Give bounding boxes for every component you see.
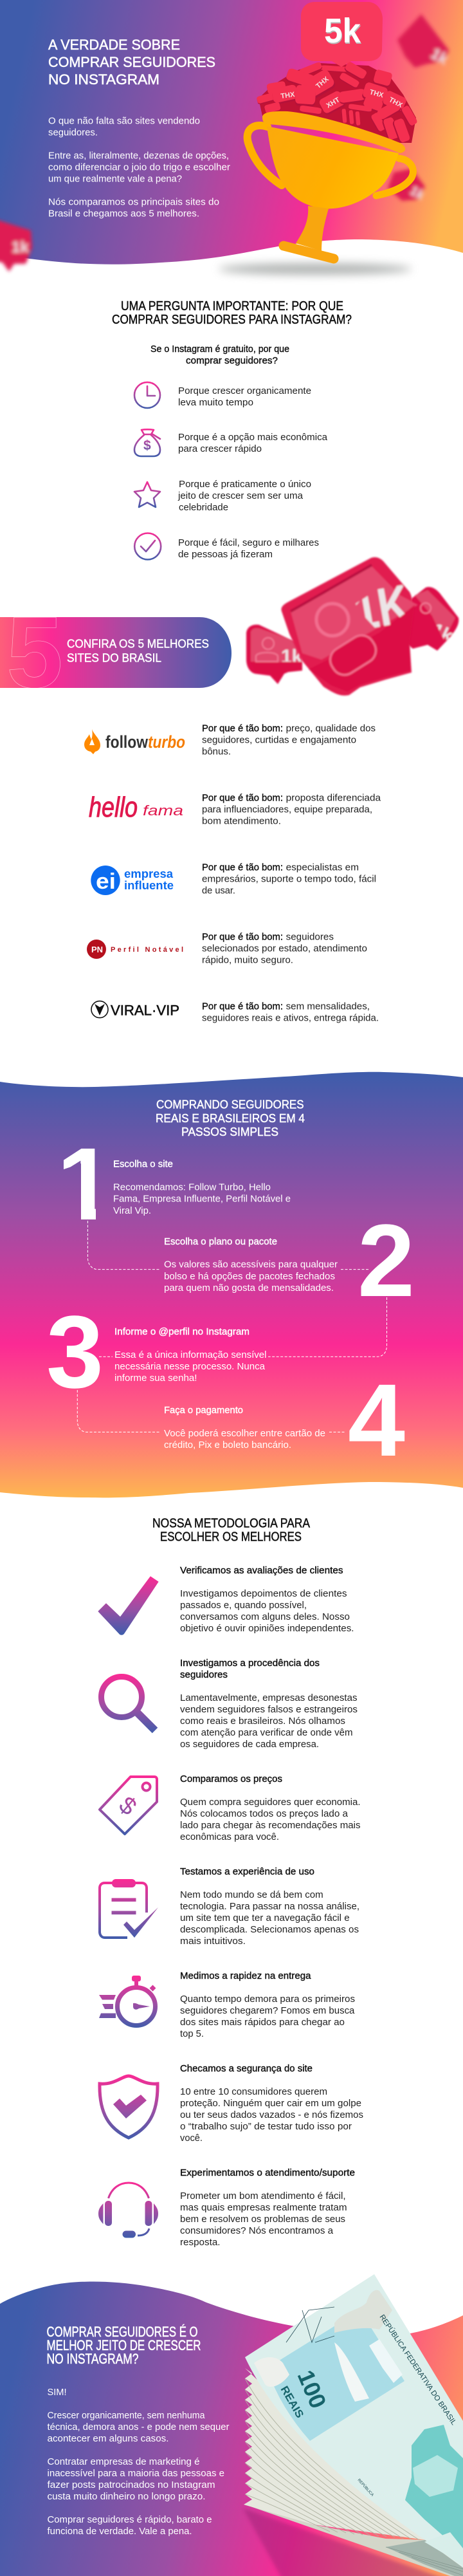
site 4 text: selecionados por estado, atendimento — [202, 943, 367, 954]
subheading: Se o Instagram é gratuito, por que — [150, 344, 289, 355]
method 7 text: consumidores? Nós encontramos a — [180, 2225, 334, 2236]
note stack side — [245, 2505, 463, 2576]
steps heading: COMPRANDO SEGUIDORES — [156, 1098, 304, 1111]
heap of red like badges: THX — [368, 88, 385, 100]
site 3 text — [202, 862, 376, 896]
banner background — [0, 617, 232, 688]
icon: price tag — [100, 1777, 157, 1834]
conclusion text: Contratar empresas de marketing é — [48, 2456, 199, 2467]
method 1 text: passados e, quando possível, — [180, 1600, 307, 1611]
conclusion heading: NO INSTAGRAM? — [46, 2351, 139, 2367]
method 1 text — [180, 1565, 354, 1634]
icon: headset — [98, 2183, 158, 2238]
panel: hero — [0, 0, 463, 275]
step 4: Você poderá escolher entre cartão de — [164, 1429, 325, 1439]
trophy handles — [248, 125, 282, 185]
steps gradient background — [0, 1072, 463, 1497]
methodology heading: NOSSA METODOLOGIA PARA — [152, 1517, 311, 1531]
conclusion text: custa muito dinheiro no longo prazo. — [48, 2491, 206, 2502]
blurred badge middle: 1k — [408, 183, 428, 203]
site 3 text: Por que é tão bom: — [202, 862, 283, 873]
logo: perfil notavel: PN — [91, 945, 103, 954]
blurred badge middle — [388, 169, 428, 203]
blurred badge right: 1k — [428, 45, 451, 69]
logo: perfil notavel — [87, 940, 183, 959]
banner title: CONFIRA OS 5 MELHORES — [67, 637, 209, 651]
method 6 text — [180, 2063, 363, 2144]
method 3 text — [180, 1774, 360, 1842]
icon: shield — [100, 2076, 158, 2138]
panel: four steps — [0, 1072, 463, 1497]
conclusion heading — [46, 2324, 201, 2367]
5k badge: 5k — [324, 12, 361, 50]
method 2 text: Investigamos a procedência dos — [180, 1658, 320, 1669]
method 2 text — [180, 1658, 358, 1750]
logo: followturbo: follow — [105, 732, 149, 752]
step 2: 2 — [358, 1203, 415, 1318]
method 1 text: Investigamos depoimentos de clientes — [180, 1588, 347, 1599]
site 1 text — [202, 723, 376, 757]
hero intro text: um que realmente vale a pena? — [48, 174, 182, 185]
reason: safe: de pessoas já fizeram — [178, 549, 273, 560]
conclusion text: fazer posts patrocinados no Instagram — [48, 2479, 215, 2490]
method 7 text: resposta. — [180, 2237, 220, 2248]
method 5 text — [180, 1970, 355, 2039]
method 7 text: mas quais empresas realmente tratam — [180, 2202, 347, 2213]
note text reais: REAIS — [278, 2384, 306, 2420]
step 2: bolso e há opções de pacotes fechados — [164, 1272, 335, 1282]
site 5 text — [202, 1001, 379, 1024]
conclusion text: técnica, demora anos - e pode nem sequer — [48, 2422, 229, 2432]
heap of red like badges: THX — [280, 91, 296, 100]
site 5 text: seguidores reais e ativos, entrega rápida. — [202, 1013, 379, 1024]
step 1: 1 — [57, 1126, 114, 1241]
connector 1 to 2 — [87, 1221, 370, 1270]
method 2 text: seguidores — [180, 1669, 228, 1680]
step 2: Escolha o plano ou pacote — [164, 1237, 277, 1247]
5k badge: 5k — [325, 13, 362, 51]
method 5 text: dos sites mais rápidos para chegar ao — [180, 2017, 345, 2028]
step 3: necessária nesse processo. Nunca — [114, 1362, 266, 1372]
icon: check circle — [134, 533, 161, 560]
site 2 text — [202, 793, 381, 826]
logo: followturbo: turbo — [148, 732, 185, 752]
method 2 text: como reais e brasileiros. Nós olhamos — [180, 1716, 345, 1727]
trophy bowl — [267, 126, 399, 208]
icon: clipboard — [100, 1879, 158, 1938]
note watermark areas — [267, 2310, 404, 2441]
trophy rim — [262, 111, 405, 153]
step 1: Recomendamos: Follow Turbo, Hello — [113, 1183, 271, 1193]
small badge left — [246, 625, 303, 684]
logo: followturbo — [84, 729, 185, 754]
subheading — [150, 344, 289, 366]
conclusion text: Comprar seguidores é rápido, barato e — [48, 2514, 212, 2525]
method 6 text: você. — [180, 2133, 203, 2144]
small badge right: 1k — [429, 619, 456, 646]
1k red badges illustration — [246, 557, 458, 696]
reason: time — [178, 385, 311, 408]
method 7 text: Experimentamos o atendimento/suporte — [180, 2167, 355, 2178]
icon: money bag — [134, 429, 160, 456]
hero intro text: Brasil e chegamos aos 5 melhores. — [48, 208, 199, 219]
subheading: comprar seguidores? — [186, 355, 278, 366]
heading — [112, 299, 352, 327]
reason: safe: Porque é fácil, seguro e milhares — [178, 537, 319, 548]
panel: methodology — [98, 1517, 363, 2248]
large badge — [281, 557, 418, 696]
step 2 — [164, 1203, 415, 1318]
method 6 text: 10 entre 10 consumidores querem — [180, 2086, 327, 2097]
5k badge — [301, 2, 383, 67]
logo: hello fama: fama — [143, 802, 183, 819]
method 4 text: mais intuitivos. — [180, 1936, 246, 1947]
trophy base — [284, 246, 334, 259]
icon: clock — [134, 382, 160, 408]
note engraved star — [286, 2307, 334, 2342]
step 3: informe sua senha! — [114, 1373, 197, 1384]
hero title: A VERDADE SOBRE — [48, 37, 180, 53]
logo: viral vip: VIRAL·VIP — [111, 1003, 179, 1019]
conclusion gradient background — [0, 2281, 463, 2576]
banner title: SITES DO BRASIL — [67, 651, 161, 665]
logo: empresa influente — [91, 866, 174, 895]
hero gradient background with wave — [0, 0, 463, 264]
method 4 text: Nem todo mundo se dá bem com — [180, 1889, 323, 1900]
icon: stopwatch — [99, 1976, 156, 2026]
site 4 text: Por que é tão bom: — [202, 931, 283, 942]
heap of red like badges — [256, 61, 418, 144]
note shadow — [243, 2508, 450, 2576]
conclusion text: inacessível para a maioria das pessoas e — [48, 2468, 224, 2479]
method 5 text: seguidores chegarem? Fomos em busca — [180, 2005, 355, 2016]
method 5 text: Medimos a rapidez na entrega — [180, 1970, 311, 1981]
connector 3 to 4 — [77, 1390, 345, 1432]
blurred badge left: 1k — [12, 239, 29, 256]
conclusion text: Crescer organicamente, sem nenhuma — [48, 2410, 205, 2421]
method 5 text: Quanto tempo demora para os primeiros — [180, 1994, 355, 2005]
steps heading: REAIS E BRASILEIROS EM 4 — [156, 1112, 305, 1125]
method 4 text: Testamos a experiência de uso — [180, 1866, 314, 1877]
heap of red like badges: XHT — [325, 96, 341, 110]
hero intro text: seguidores. — [48, 127, 98, 138]
trophy illustration — [219, 2, 451, 275]
site 4 text: seguidores — [286, 931, 334, 942]
reason: celebrity: Porque é praticamente o único — [179, 479, 311, 490]
blurred badge right — [397, 14, 451, 69]
step 1: Viral Vip. — [113, 1206, 151, 1216]
method 4 text: tecnologia. Para passar na nossa análise, — [180, 1901, 359, 1912]
reason: celebrity: celebridade — [179, 502, 228, 513]
heading: COMPRAR SEGUIDORES PARA INSTAGRAM? — [112, 313, 352, 327]
method 1 text: objetivo é ouvir opiniões independentes. — [180, 1623, 354, 1634]
hero title — [48, 37, 215, 88]
hero intro text: O que não falta são sites vendendo — [48, 116, 200, 127]
site 1 text: Por que é tão bom: — [202, 723, 283, 734]
connector 2 to 3 — [99, 1297, 387, 1357]
step 4 — [164, 1362, 405, 1478]
methodology heading: ESCOLHER OS MELHORES — [160, 1530, 302, 1544]
large badge: 1K — [349, 573, 414, 642]
heap of red like badges: THX — [314, 75, 331, 90]
steps heading — [156, 1098, 305, 1138]
step 3: Informe o @perfil no Instagram — [114, 1327, 250, 1337]
site 5 text: Por que é tão bom: — [202, 1001, 283, 1012]
panel: conclusion — [0, 2274, 463, 2576]
note text 100: 100 — [293, 2366, 332, 2412]
fanned note edges — [244, 2368, 425, 2540]
reason: safe — [178, 537, 319, 560]
conclusion text: SIM! — [48, 2387, 67, 2398]
method 2 text: com atenção para verificar de onde vêm — [180, 1727, 353, 1738]
reason: celebrity — [177, 479, 311, 513]
method 6 text: o “trabalho sujo” de testar tudo isso por — [180, 2121, 352, 2132]
hero intro text: como diferenciar o joio do trigo e escolher — [48, 162, 230, 173]
methodology heading — [152, 1517, 311, 1544]
method 2 text: Lamentavelmente, empresas desonestas — [180, 1692, 358, 1703]
reason: price: Porque é a opção mais econômica — [178, 432, 328, 443]
trophy stem — [296, 206, 329, 251]
logo: hello fama — [89, 792, 183, 823]
logo: perfil notavel: Perfil Notável — [111, 946, 183, 954]
method 3 text: econômicas para você. — [180, 1831, 279, 1842]
conclusion heading: COMPRAR SEGUIDORES É O — [46, 2324, 198, 2340]
bank notes illustration — [243, 2274, 463, 2576]
reason: time: Porque crescer organicamente — [178, 385, 311, 396]
hero intro text — [48, 116, 230, 219]
conclusion heading: MELHOR JEITO DE CRESCER — [46, 2337, 201, 2353]
note portrait — [405, 2425, 463, 2548]
banner title — [67, 637, 209, 665]
step 1: Escolha o site — [113, 1160, 173, 1170]
small badge right — [408, 586, 460, 651]
method 2 text: vendem seguidores falsos e estrangeiros — [180, 1704, 358, 1715]
step 1 — [64, 1148, 291, 1219]
conclusion text — [48, 2387, 229, 2537]
method 3 text: Comparamos os preços — [180, 1774, 282, 1784]
panel: top 5 banner — [0, 557, 458, 709]
steps heading: PASSOS SIMPLES — [181, 1126, 278, 1138]
method 3 text: lado para chegar às recomendações mais — [180, 1820, 360, 1831]
method 2 text: os seguidores de cada empresa. — [180, 1739, 319, 1750]
method 6 text: proteção. Ninguém quer cair em um golpe — [180, 2098, 361, 2109]
step 4: crédito, Pix e boleto bancário. — [164, 1440, 291, 1450]
reason: time: leva muito tempo — [178, 397, 253, 408]
site 3 text: especialistas em — [286, 862, 359, 873]
site 5 text: sem mensalidades, — [286, 1001, 370, 1012]
icon: price tag: $ — [114, 1792, 141, 1821]
step 3: 3 — [46, 1294, 104, 1409]
conclusion text: acontecer em alguns casos. — [48, 2433, 168, 2444]
site 1 text: preço, qualidade dos — [286, 723, 376, 734]
site 2 text: para influenciadores, equipe preparada, — [202, 804, 372, 815]
site 1 text: seguidores, curtidas e engajamento — [202, 735, 356, 746]
conclusion text: funciona de verdade. Vale a pena. — [48, 2526, 192, 2537]
logo: empresa influente: empresa — [124, 867, 174, 880]
reason: price — [178, 432, 328, 454]
site 2 text: proposta diferenciada — [286, 793, 381, 803]
method 4 text — [180, 1866, 359, 1947]
method 3 text: Quem compra seguidores quer economia. — [180, 1797, 360, 1808]
heading: UMA PERGUNTA IMPORTANTE: POR QUE — [121, 299, 343, 313]
top note — [245, 2274, 463, 2568]
step 2: Os valores são acessíveis para qualquer — [164, 1260, 338, 1270]
site 3 text: empresários, suporte o tempo todo, fácil — [202, 874, 376, 885]
blurred badge left — [0, 219, 32, 272]
hero title: COMPRAR SEGUIDORES — [48, 54, 215, 70]
site 1 text: bônus. — [202, 746, 231, 757]
step 4: 4 — [348, 1362, 405, 1478]
method 7 text — [180, 2167, 355, 2248]
icon: money bag: $ — [143, 438, 151, 453]
step 1: Fama, Empresa Influente, Perfil Notável e — [113, 1194, 291, 1205]
trophy shadow — [219, 263, 412, 275]
logo: empresa influente: influente — [124, 879, 174, 892]
logo: empresa influente: ei — [96, 869, 116, 894]
icon: magnifier — [102, 1677, 155, 1730]
step 3 — [46, 1294, 266, 1409]
method 4 text: descomplicada. Selecionamos apenas os — [180, 1924, 359, 1935]
step 2: para quem não gosta de mensalidades. — [164, 1283, 334, 1293]
method 6 text: ou ter seus dados vazados - e nós fizemos — [180, 2109, 363, 2120]
method 7 text: bem e resolvem os problemas de seus — [180, 2214, 345, 2225]
hero intro text: Nós comparamos os principais sites do — [48, 197, 219, 208]
outlined number 5: 5 — [6, 596, 63, 709]
site 4 text — [202, 931, 367, 965]
step 4: Faça o pagamento — [164, 1405, 243, 1416]
note text republica: REPÚBLICA FEDERATIVA DO BRASIL — [378, 2313, 458, 2427]
method 4 text: um site tem que ter a navegação fácil e — [180, 1913, 350, 1923]
step 3: Essa é a única informação sensível — [114, 1350, 266, 1360]
method 1 text: conversamos com alguns deles. Nosso — [180, 1611, 350, 1622]
method 3 text: Nós colocamos todos os preços lado a — [180, 1808, 349, 1819]
method 7 text: Prometer um bom atendimento é fácil, — [180, 2191, 346, 2201]
hero title: NO INSTAGRAM — [48, 71, 159, 88]
note small text: REPÚBLICA — [357, 2478, 374, 2497]
reason: celebrity: jeito de crescer sem ser uma — [177, 490, 304, 501]
method 5 text: top 5. — [180, 2028, 204, 2039]
method 6 text: Checamos a segurança do site — [180, 2063, 313, 2074]
method 1 text: Verificamos as avaliações de clientes — [180, 1565, 343, 1576]
logo: hello fama: hello — [89, 792, 138, 823]
panel: why buy followers — [112, 299, 352, 560]
hero intro text: Entre as, literalmente, dezenas de opções, — [48, 151, 229, 162]
site 2 text: Por que é tão bom: — [202, 793, 283, 803]
icon: star — [134, 482, 160, 507]
site 2 text: bom atendimento. — [202, 816, 281, 826]
panel: top 5 sites list — [84, 723, 381, 1024]
site 4 text: rápido, muito seguro. — [202, 954, 293, 965]
icon: check mark — [98, 1577, 158, 1635]
reason: price: para crescer rápido — [178, 443, 262, 454]
heap of red like badges: THX — [388, 96, 404, 109]
small badge left: 1k — [281, 646, 303, 667]
site 3 text: de usar. — [202, 885, 235, 896]
